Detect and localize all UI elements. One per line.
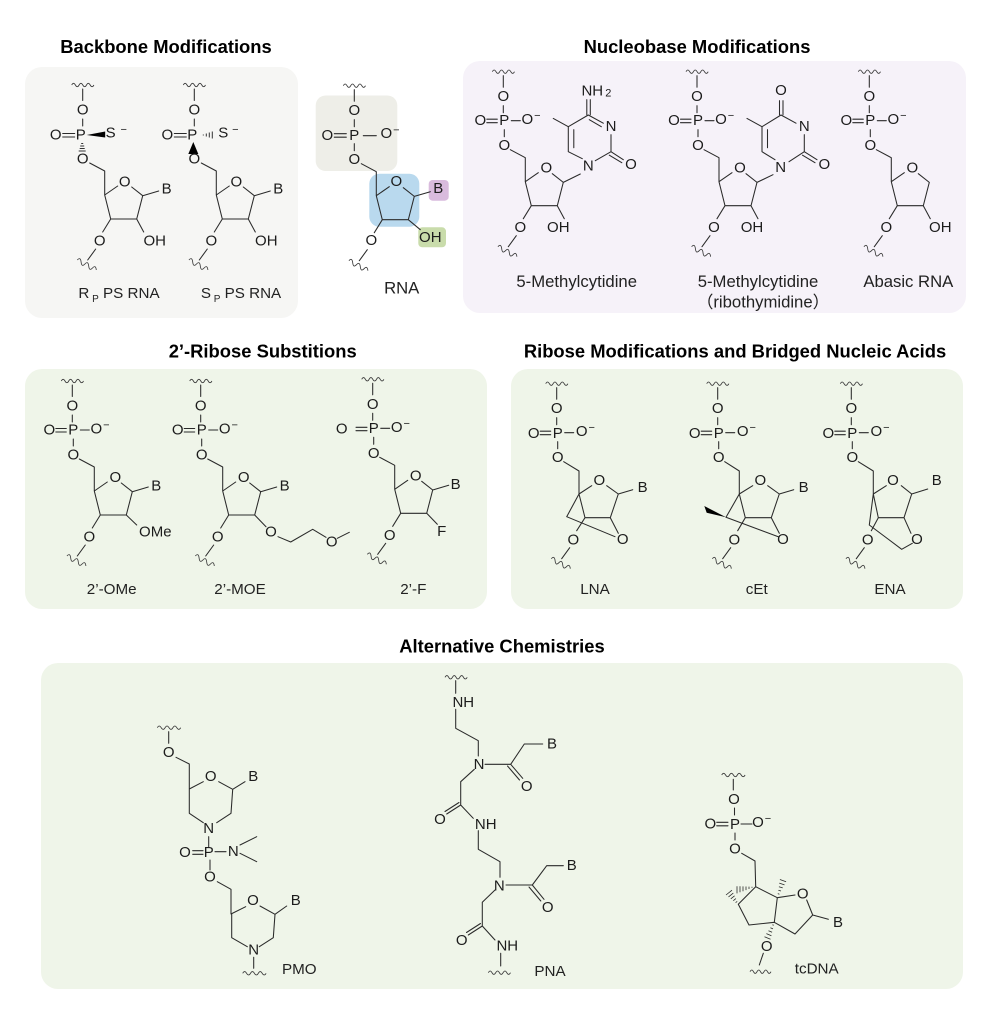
molecule: ENA: O bbox=[911, 531, 923, 548]
molecule: cEt: B bbox=[799, 479, 809, 496]
molecule: ribothymidine bbox=[668, 70, 830, 257]
label: RP PS RNA: P bbox=[89, 294, 99, 305]
panel background bbox=[511, 369, 963, 609]
molecule: tcDNA: O bbox=[761, 938, 773, 955]
label: 5-Methylcytidine (ribothymidine): （ribothymidine） bbox=[697, 292, 829, 312]
molecule: cEt: O bbox=[737, 423, 749, 440]
molecule: abasic RNA: OH bbox=[929, 219, 952, 236]
label: PMO: PMO bbox=[282, 961, 317, 978]
molecule: SP PS RNA: O bbox=[188, 150, 200, 168]
molecule: SP PS RNA: P bbox=[187, 126, 197, 144]
molecule: ribothymidine: − bbox=[728, 110, 734, 122]
molecule: 2'-F: P bbox=[369, 420, 379, 437]
molecule: PNA: NH bbox=[452, 694, 474, 711]
molecule: ribothymidine: O bbox=[734, 160, 746, 177]
molecule: SP PS RNA: S bbox=[218, 124, 228, 142]
label: tcDNA: tcDNA bbox=[795, 960, 840, 978]
panel: bridged nucleic acids bbox=[511, 369, 963, 609]
molecule: RP PS RNA: B bbox=[162, 180, 172, 198]
molecule: PMO: O bbox=[204, 868, 216, 886]
label: cEt: cEt bbox=[746, 581, 768, 598]
molecule: SP PS RNA: OH bbox=[255, 232, 278, 250]
heading: Ribose Modifications and Bridged Nucleic Acids: Ribose Modifications and Bridged Nucleic Acids bbox=[524, 340, 946, 362]
molecule: ENA: − bbox=[883, 422, 890, 434]
molecule: abasic RNA: P bbox=[865, 112, 875, 129]
molecule: RP PS RNA: O bbox=[119, 174, 131, 190]
molecule: 2'-MOE: O bbox=[172, 422, 184, 438]
molecule: RNA: OH bbox=[419, 229, 442, 246]
molecule: RNA: O bbox=[348, 102, 360, 119]
molecule: RP PS RNA bbox=[50, 83, 172, 270]
molecule: RP PS RNA: O bbox=[94, 232, 106, 250]
molecule: 2'-OMe: P bbox=[68, 422, 78, 438]
molecule: tcDNA: − bbox=[765, 813, 771, 825]
molecule: LNA: P bbox=[553, 425, 563, 442]
molecule: 2'-F: O bbox=[336, 420, 348, 437]
molecule: LNA: O bbox=[528, 425, 540, 442]
molecule: 5-Methylcytidine: N bbox=[583, 158, 594, 174]
label: ENA: ENA bbox=[874, 581, 906, 598]
label: PNA: PNA bbox=[534, 963, 566, 980]
molecule: abasic RNA: O bbox=[887, 111, 899, 128]
molecule: tcDNA: P bbox=[730, 816, 740, 833]
molecule: PNA: B bbox=[567, 857, 577, 874]
molecule: 2'-OMe: O bbox=[90, 420, 102, 438]
molecule: PMO: N bbox=[203, 820, 214, 837]
label: 5-Methylcytidine (ribothymidine): 5-Methylcytidine bbox=[698, 272, 818, 291]
molecule: RNA: O bbox=[390, 173, 402, 190]
label: RP PS RNA: PS RNA bbox=[99, 285, 160, 302]
molecule: tcDNA bbox=[704, 773, 843, 973]
molecule: RNA: O bbox=[321, 127, 333, 144]
molecule: 2'-F: B bbox=[451, 476, 461, 493]
molecule: PNA bbox=[434, 676, 577, 974]
molecule: 5-Methylcytidine: O bbox=[521, 111, 533, 128]
label: 2'-MOE: 2’-MOE bbox=[214, 581, 266, 598]
molecule: RNA: B bbox=[433, 180, 443, 197]
molecule: RNA bbox=[321, 84, 443, 271]
molecule: RP PS RNA: S bbox=[106, 124, 116, 142]
molecule: 2'-MOE: O bbox=[219, 420, 231, 438]
molecule: 5-Methylcytidine: O bbox=[540, 160, 552, 177]
molecule: ribothymidine: N bbox=[775, 159, 786, 176]
molecule: 2'-OMe: O bbox=[83, 528, 95, 546]
molecule: cEt: O bbox=[713, 449, 725, 466]
molecule: 2'-F: − bbox=[403, 418, 410, 430]
molecule: abasic RNA: O bbox=[906, 160, 918, 177]
molecule: cEt: O bbox=[689, 425, 701, 442]
molecule: ribothymidine: O bbox=[691, 88, 703, 105]
highlight: base bbox=[429, 180, 449, 201]
molecule: PMO: O bbox=[205, 768, 217, 785]
molecule: 2'-OMe bbox=[43, 379, 172, 566]
molecule: 2'-F: O bbox=[410, 467, 422, 484]
molecule: LNA: O bbox=[617, 531, 629, 548]
highlight: 2' hydroxyl bbox=[418, 227, 446, 247]
molecule: SP PS RNA: O bbox=[230, 174, 242, 190]
heading: Backbone Modifications: Backbone Modifications bbox=[60, 36, 272, 57]
panel background bbox=[41, 663, 963, 989]
label: LNA: LNA bbox=[580, 581, 611, 598]
molecule: 2'-MOE: O bbox=[212, 528, 224, 546]
molecule: ribothymidine: O bbox=[775, 82, 787, 99]
molecule: abasic RNA bbox=[840, 70, 952, 257]
label: Abasic RNA: Abasic RNA bbox=[863, 272, 954, 291]
molecule: PNA: N bbox=[474, 756, 484, 773]
molecule: tcDNA: B bbox=[833, 914, 843, 931]
heading: 2'-Ribose Substitions: 2’-Ribose Substitions bbox=[169, 340, 357, 362]
molecule: ENA: O bbox=[846, 449, 858, 466]
molecule: LNA bbox=[528, 382, 648, 569]
molecule: 5-Methylcytidine: O bbox=[474, 112, 486, 129]
molecule: RP PS RNA: O bbox=[77, 102, 89, 118]
molecule: 2'-F: O bbox=[367, 396, 379, 413]
molecule: PNA: O bbox=[542, 899, 554, 916]
panel background bbox=[25, 369, 487, 609]
panel: backbone modifications bbox=[25, 67, 298, 318]
molecule: LNA: B bbox=[638, 479, 648, 496]
molecule: 5-Methylcytidine bbox=[474, 70, 637, 257]
molecule: PMO: O bbox=[247, 892, 259, 909]
molecule: PMO: O bbox=[163, 744, 175, 761]
molecule: RP PS RNA: O bbox=[50, 126, 62, 144]
diagram: RNA reference structure bbox=[316, 84, 449, 298]
molecule: 2'-MOE: O bbox=[326, 534, 338, 550]
molecule: cEt: P bbox=[714, 425, 724, 442]
molecule: ENA: O bbox=[845, 400, 857, 417]
heading: Nucleobase Modifications: Nucleobase Modifications bbox=[584, 36, 810, 57]
molecule: tcDNA: O bbox=[728, 791, 740, 808]
molecule: ribothymidine: O bbox=[708, 219, 720, 236]
molecule: 2'-F bbox=[336, 378, 461, 564]
molecule: cEt: O bbox=[712, 400, 724, 417]
molecule: abasic RNA: O bbox=[864, 137, 876, 154]
label: 2'-OMe: 2’-OMe bbox=[87, 581, 137, 598]
molecule: RNA: O bbox=[365, 232, 377, 249]
molecule: PMO: O bbox=[179, 844, 191, 861]
label: RNA: RNA bbox=[384, 278, 420, 298]
molecule: 2'-MOE: B bbox=[280, 478, 290, 494]
molecule: 5-Methylcytidine: O bbox=[497, 88, 509, 105]
molecule: 2'-OMe: O bbox=[109, 469, 121, 486]
molecule: cEt: − bbox=[749, 422, 756, 434]
label: SP PS RNA: P bbox=[211, 294, 221, 305]
molecule: 5-Methylcytidine: O bbox=[514, 219, 526, 236]
molecule: 2'-F: F bbox=[437, 523, 446, 540]
molecule: 2'-OMe: O bbox=[66, 398, 78, 414]
heading: Alternative Chemistries: Alternative Chemistries bbox=[399, 636, 605, 656]
molecule: tcDNA: O bbox=[797, 886, 809, 902]
molecule: 2'-OMe: OMe bbox=[139, 524, 172, 540]
molecule: ribothymidine: P bbox=[693, 112, 703, 129]
molecule: 5-Methylcytidine: OH bbox=[547, 219, 570, 236]
molecule: abasic RNA: O bbox=[880, 219, 892, 236]
molecule: 2'-OMe: O bbox=[67, 446, 79, 464]
molecule: 2'-F: O bbox=[368, 445, 380, 462]
molecule: ENA: O bbox=[862, 532, 874, 549]
panel: 2'-ribose substitutions bbox=[25, 369, 487, 609]
molecule: 2'-F: O bbox=[384, 527, 396, 544]
molecule: SP PS RNA: O bbox=[161, 126, 173, 144]
molecule: RP PS RNA: OH bbox=[143, 232, 166, 250]
panel: nucleobase modifications bbox=[463, 61, 966, 313]
molecule: RNA: O bbox=[348, 151, 360, 168]
molecule: ribothymidine: N bbox=[799, 118, 810, 135]
molecule: PNA: NH bbox=[496, 938, 518, 954]
molecule: SP PS RNA: B bbox=[273, 180, 283, 198]
molecule: ENA: P bbox=[847, 425, 857, 442]
molecule: cEt bbox=[689, 382, 809, 569]
molecule: LNA: O bbox=[567, 532, 579, 549]
molecule: PMO: P bbox=[204, 844, 214, 861]
molecule: SP PS RNA: − bbox=[232, 124, 239, 136]
molecule: ribothymidine: O bbox=[668, 112, 680, 129]
molecule: LNA: O bbox=[593, 472, 605, 489]
molecule: 5-Methylcytidine: NH bbox=[581, 82, 603, 99]
molecule: SP PS RNA bbox=[161, 83, 283, 270]
molecule: RP PS RNA: − bbox=[120, 124, 127, 136]
molecule: ENA: O bbox=[887, 472, 899, 489]
highlight: sugar bbox=[369, 174, 419, 227]
molecule: SP PS RNA: O bbox=[205, 232, 217, 250]
molecule: 2'-OMe: B bbox=[151, 478, 161, 494]
molecule: tcDNA: O bbox=[704, 816, 716, 832]
molecule: cEt: O bbox=[728, 532, 740, 549]
molecule: PNA: O bbox=[434, 811, 446, 828]
molecule: SP PS RNA: O bbox=[188, 102, 200, 118]
molecule: LNA: O bbox=[552, 449, 564, 466]
highlight: phosphate bbox=[316, 96, 397, 171]
molecule: cEt: O bbox=[777, 531, 789, 548]
molecule: 2'-MOE bbox=[172, 379, 349, 566]
molecule: PMO: B bbox=[291, 892, 301, 909]
molecule: PNA: B bbox=[547, 736, 557, 752]
molecule: cEt: O bbox=[754, 472, 766, 489]
molecule: RNA: − bbox=[393, 125, 400, 137]
molecule: 2'-MOE: P bbox=[197, 422, 207, 438]
molecule: 2'-OMe: O bbox=[43, 422, 55, 438]
molecule: abasic RNA: O bbox=[840, 112, 852, 129]
molecule: 5-Methylcytidine: P bbox=[499, 112, 509, 129]
molecule: PMO: N bbox=[228, 843, 239, 860]
molecule: ENA: O bbox=[822, 425, 834, 442]
molecule: ENA: B bbox=[932, 472, 942, 489]
molecule: RNA: O bbox=[380, 125, 392, 142]
molecule: 5-Methylcytidine: N bbox=[606, 118, 616, 135]
molecule: 2'-MOE: O bbox=[238, 469, 250, 486]
molecule: PNA: O bbox=[521, 778, 533, 795]
molecule: 5-Methylcytidine: − bbox=[534, 110, 541, 122]
molecule: 2'-MOE: O bbox=[265, 524, 277, 540]
molecule: LNA: O bbox=[551, 400, 563, 417]
label: RP PS RNA: R bbox=[78, 285, 89, 302]
molecule: ENA: O bbox=[870, 423, 882, 440]
molecule: ribothymidine: O bbox=[692, 137, 704, 154]
panel background bbox=[463, 61, 966, 313]
molecule: RP PS RNA: O bbox=[77, 150, 89, 168]
molecule: 2'-MOE: − bbox=[231, 420, 238, 432]
molecule: tcDNA: O bbox=[752, 814, 764, 831]
molecule: ENA bbox=[822, 382, 942, 569]
molecule: ribothymidine: O bbox=[715, 111, 727, 128]
molecule: 2'-MOE: O bbox=[196, 446, 208, 464]
molecule: ribothymidine: OH bbox=[741, 219, 763, 236]
label: SP PS RNA: S bbox=[201, 285, 211, 302]
molecule: ribothymidine: O bbox=[818, 156, 830, 173]
molecule: PMO: B bbox=[248, 768, 258, 785]
label: SP PS RNA: PS RNA bbox=[220, 285, 282, 302]
molecule: LNA: − bbox=[588, 422, 595, 434]
molecule: 2'-MOE: O bbox=[195, 398, 207, 414]
molecule: LNA: O bbox=[576, 423, 588, 440]
molecule: 5-Methylcytidine: 2 bbox=[605, 87, 611, 99]
molecule: 2'-OMe: − bbox=[103, 420, 110, 432]
molecule: PNA: N bbox=[494, 878, 505, 894]
molecule: tcDNA: O bbox=[729, 840, 741, 858]
panel background bbox=[25, 67, 298, 318]
molecule: PMO: N bbox=[248, 942, 259, 958]
label: 5-Methylcytidine: 5-Methylcytidine bbox=[516, 272, 637, 291]
molecule: PMO bbox=[157, 726, 301, 975]
panel: alternative chemistries bbox=[41, 663, 963, 989]
molecule: 2'-F: O bbox=[391, 419, 403, 436]
molecule: 5-Methylcytidine: O bbox=[498, 137, 510, 154]
molecule: 5-Methylcytidine: O bbox=[625, 156, 637, 173]
molecule: RNA: P bbox=[349, 127, 359, 144]
molecule: abasic RNA: − bbox=[900, 110, 907, 122]
molecule: RP PS RNA: P bbox=[76, 126, 86, 144]
molecule: abasic RNA: O bbox=[863, 88, 875, 105]
molecule: PNA: NH bbox=[475, 816, 497, 833]
molecule: PNA: O bbox=[456, 932, 468, 949]
label: 2'-F: 2’-F bbox=[400, 581, 426, 598]
